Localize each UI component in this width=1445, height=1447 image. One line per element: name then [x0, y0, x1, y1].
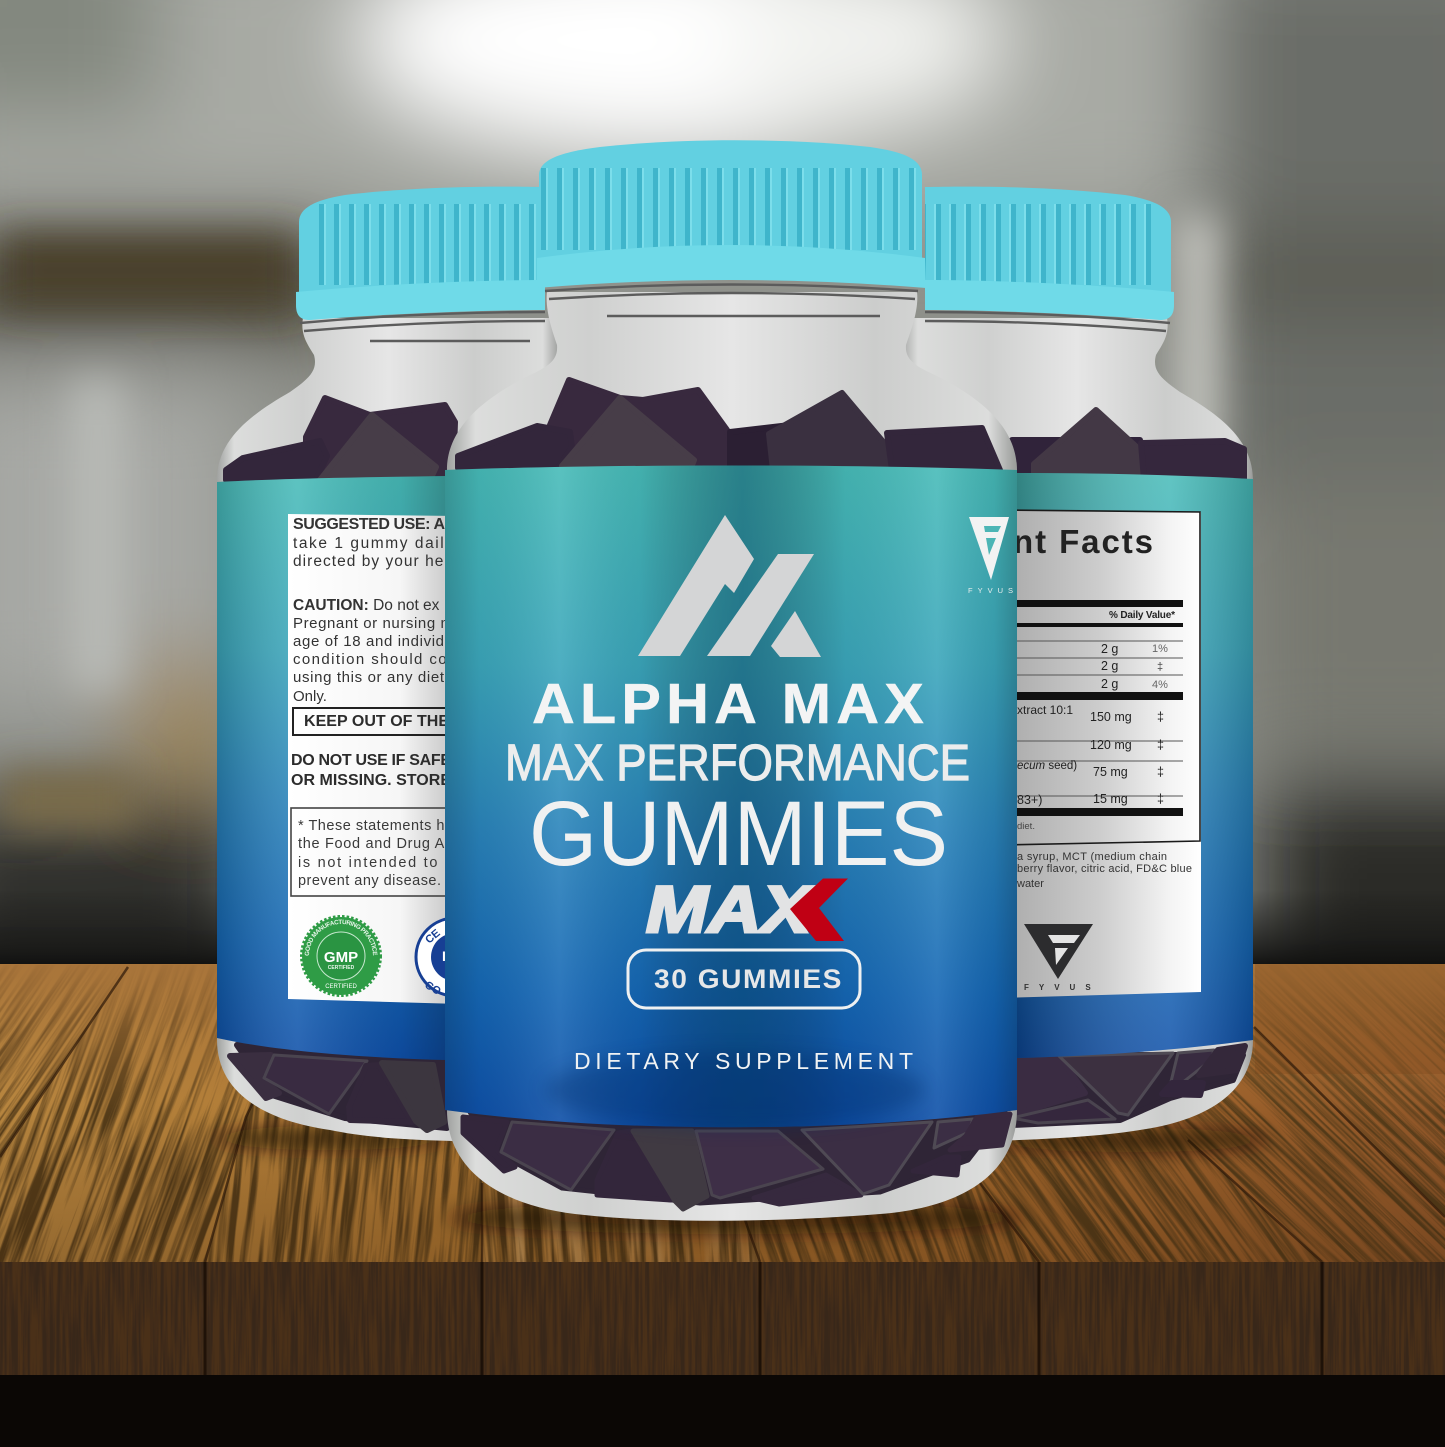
facts table values: ‡: [1157, 765, 1164, 779]
safety seal warning: [292, 754, 445, 785]
suggested use text: take 1 gummy daily: [293, 535, 453, 552]
GMP certified badge: GOOD MANUFACTURING PRACTICE: [304, 920, 378, 956]
facts table values: 120 mg: [1090, 738, 1132, 752]
table top: [0, 964, 1445, 1264]
suggested use text: [293, 516, 453, 570]
FDA disclaimer box: [291, 808, 466, 896]
safety seal warning: OR MISSING. STORE: [291, 772, 451, 789]
caution text: using this or any dieto: [293, 669, 453, 686]
product descriptor: MAX PERFORMANCE: [505, 734, 970, 791]
GMP certified badge: [300, 915, 382, 997]
facts table values: xtract 10:1: [1017, 703, 1073, 717]
keep out of reach box: KEEP OUT OF THE: [304, 713, 449, 730]
facts table values: ‡: [1157, 710, 1164, 724]
facts table values: 2 g: [1101, 659, 1118, 673]
FYVUS small logo: FYVUS: [968, 586, 1018, 595]
facts table values: [1017, 610, 1175, 832]
ISO certified seal: [414, 918, 445, 996]
main bottle gummies top: [458, 380, 1000, 472]
product name: ALPHA MAX: [532, 672, 929, 736]
FDA disclaimer box: * These statements ha: [298, 818, 454, 834]
facts table values: 150 mg: [1090, 710, 1132, 724]
ingredients text: [1017, 852, 1192, 887]
table front face: [0, 1262, 1445, 1376]
Alpha Max mountain logo: [638, 515, 821, 657]
FYVUS logo: [1024, 924, 1093, 990]
facts table values: ‡: [1157, 792, 1164, 806]
GMP certified badge: CERTIFIED: [325, 984, 357, 990]
caution text: condition should cor: [293, 651, 453, 668]
left bottle gummies: [226, 398, 455, 1130]
facts table values: ‡: [1157, 738, 1164, 752]
left bottle: back label: [217, 186, 557, 1141]
FDA disclaimer box: prevent any disease.: [298, 873, 441, 889]
caution text: age of 18 and individu: [293, 633, 453, 650]
facts table values: 15 mg: [1093, 792, 1128, 806]
ISO certified seal: CO: [422, 979, 443, 998]
caution text: [293, 597, 453, 705]
facts table rules: [1000, 600, 1183, 816]
GMP certified badge: CERTIFIED: [328, 965, 355, 971]
ISO certified seal: CE: [423, 927, 443, 946]
main bottle gummies bottom: [463, 1112, 1010, 1209]
ISO certified seal: I: [442, 948, 446, 964]
facts table values: 2 g: [1101, 642, 1118, 656]
gummies heading: GUMMIES: [529, 783, 948, 885]
left bottle glass: [217, 318, 560, 1142]
ingredients text: a syrup, MCT (medium chain: [1017, 851, 1167, 863]
panel heading: nt Facts: [1013, 523, 1155, 560]
facts table values: 1%: [1152, 643, 1168, 655]
ingredients text: water: [1016, 878, 1044, 890]
panel border: [1000, 510, 1200, 845]
FYVUS small logo: [968, 517, 1018, 595]
left bottle cap: [296, 187, 545, 320]
right bottle gummies: [1012, 410, 1245, 1125]
suggested use text: SUGGESTED USE: A: [293, 516, 445, 533]
facts table values: ‡: [1157, 661, 1163, 673]
right bottle neck reflections: [925, 312, 1170, 331]
caution text: CAUTION: Do not ex: [293, 597, 440, 614]
GMP certified badge: GMP: [324, 949, 358, 966]
FDA disclaimer box: the Food and Drug Ad: [298, 836, 453, 852]
MAX logo with red chevron: MAX: [646, 872, 815, 946]
main bottle glass: [447, 292, 1017, 1221]
table shadow band: [0, 1375, 1445, 1447]
right bottle glass: [900, 318, 1253, 1142]
facts table values: % Daily Value*: [1109, 610, 1175, 621]
FYVUS logo: FYVUS: [1024, 983, 1101, 992]
nutrition facts panel: [1000, 510, 1201, 998]
safety seal warning: DO NOT USE IF SAFE: [291, 752, 451, 769]
plank gaps on table top: [0, 965, 1445, 1262]
suggested use text: directed by your hea: [293, 553, 453, 570]
keep out of reach box: [293, 708, 463, 735]
facts table values: diet.: [1017, 821, 1035, 832]
right bottle: supplement facts: [900, 187, 1253, 1142]
wooden table: [0, 964, 1445, 1447]
main bottle: front label: [445, 140, 1018, 1221]
facts table values: 2 g: [1101, 677, 1118, 691]
right bottle label: [1017, 473, 1253, 1058]
main bottle label: [445, 466, 1017, 1127]
right bottle cap: [925, 187, 1174, 320]
count pill: [628, 950, 860, 1008]
left bottle label: [217, 476, 447, 1060]
facts table values: ecum seed): [1017, 760, 1077, 772]
facts table values: 83+): [1017, 793, 1042, 807]
facts table values: 4%: [1152, 679, 1168, 691]
bottle contact shadows: [210, 1126, 1270, 1234]
caution text: Only.: [293, 688, 327, 705]
caution text: Pregnant or nursing m: [293, 615, 453, 632]
left bottle neck reflections: [300, 312, 545, 341]
FDA disclaimer box: is not intended to d: [298, 855, 453, 871]
dietary supplement text: DIETARY SUPPLEMENT: [574, 1048, 913, 1074]
count pill: 30 GUMMIES: [654, 964, 843, 994]
main bottle neck reflections: [545, 284, 918, 316]
blurred room background: [0, 0, 1445, 1000]
ingredients text: berry flavor, citric acid, FD&C blue: [1017, 863, 1192, 875]
facts table values: 75 mg: [1093, 765, 1128, 779]
main bottle cap: [537, 140, 926, 288]
back panel: directions and warnings: [288, 514, 445, 1004]
